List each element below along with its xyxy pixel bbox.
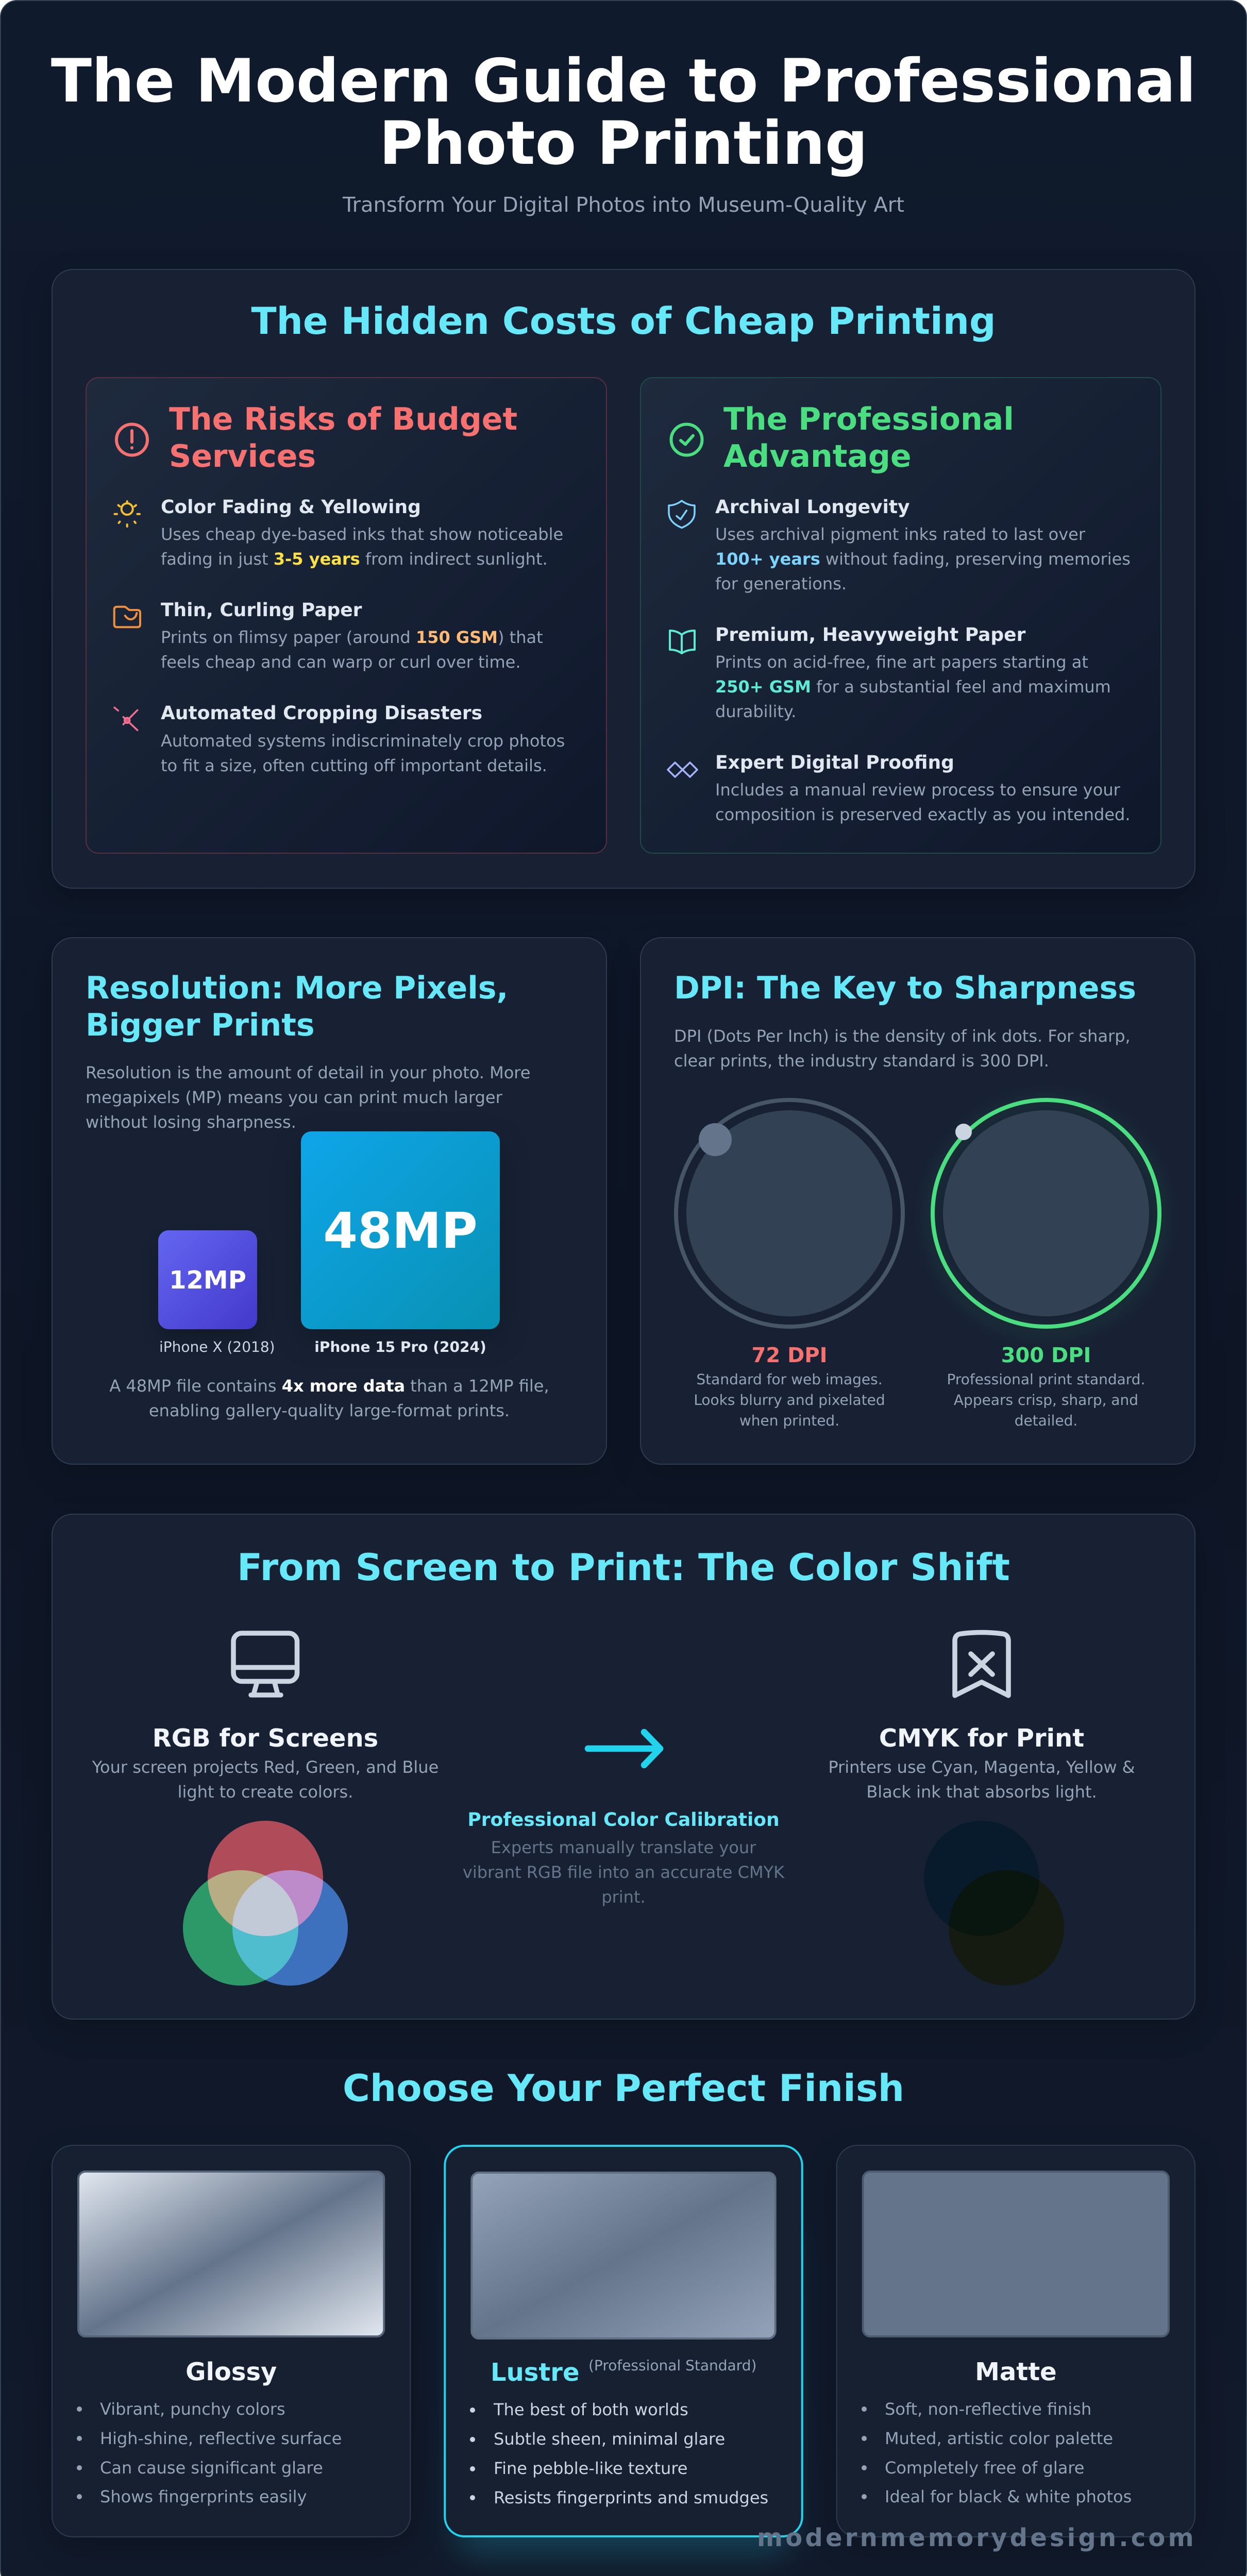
panel: glossy — [52, 2145, 411, 2548]
item: thin paper: Prints on flimsy paper (around — [161, 628, 416, 647]
text: resolution note: 4x more data than a 12MP file, — [282, 1376, 549, 1396]
swatch: matte — [863, 2172, 1169, 2336]
text: resolution intro: Resolution is the amount of detail in your photo. More — [86, 1063, 530, 1082]
graphic: 300 DPI circle — [932, 1100, 1160, 1332]
watermark: modernmemorydesign.com — [757, 2523, 1197, 2552]
subtitle: Transform Your Digital Photos into Museum-Quality Art — [342, 193, 904, 217]
panel: DPI — [640, 938, 1195, 1475]
item: archival longevity: for generations. — [715, 574, 847, 594]
item: heavyweight paper: durability. — [715, 702, 796, 721]
icon: shield — [669, 501, 695, 528]
list: glossy — [77, 2399, 342, 2506]
block: calibration: Professional Color Calibration — [467, 1809, 780, 1831]
icon: book — [670, 631, 695, 653]
heading: hidden costs: The Hidden Costs of Cheap Printing — [251, 299, 996, 343]
heading: resolution: Bigger Prints — [86, 1007, 315, 1043]
label: iPhone X: iPhone X (2018) — [159, 1338, 275, 1355]
panel: resolution — [52, 938, 607, 1475]
label: 72 DPI — [694, 1344, 885, 1429]
item: archival longevity: Archival Longevity — [715, 497, 910, 518]
list: glossy: High-shine, reflective surface — [100, 2429, 342, 2448]
title: Photo Printing — [379, 109, 868, 178]
block: calibration: Experts manually translate your — [491, 1838, 756, 1857]
graphic: CMYK venn — [924, 1821, 1064, 1986]
text: resolution intro: megapixels (MP) means you can print much larger — [86, 1088, 503, 1107]
icon: bookmark x — [955, 1632, 1008, 1696]
label: 72 DPI: Standard for web images. — [696, 1371, 883, 1388]
icon: sun — [114, 501, 140, 527]
item: heavyweight paper — [715, 624, 1111, 721]
arrow — [588, 1732, 660, 1765]
heading: finish: Choose Your Perfect Finish — [343, 2066, 904, 2110]
list: glossy: Can cause significant glare — [100, 2458, 323, 2478]
item: cropping disasters: to fit a size, often cutting off important details. — [161, 756, 547, 775]
block: RGB: Your screen projects Red, Green, and Blue — [92, 1757, 439, 1777]
heading: advantage: The Professional — [723, 401, 1014, 437]
item: color fading: fading in just — [161, 549, 274, 569]
item: heavyweight paper: Prints on acid-free, fine art papers starting at — [715, 652, 1088, 672]
list: matte: Completely free of glare — [885, 2458, 1084, 2478]
item: archival longevity: Uses archival pigment inks rated to last over — [715, 524, 1086, 544]
block: CMYK: CMYK for Print — [879, 1724, 1084, 1753]
graphic: 12MP tile: 12MP — [169, 1266, 246, 1295]
block: CMYK: Black ink that absorbs light. — [866, 1782, 1097, 1802]
heading: risks: The Risks of Budget — [169, 401, 517, 437]
text: resolution intro: without losing sharpness. — [86, 1112, 296, 1132]
label: 72 DPI: Looks blurry and pixelated — [694, 1392, 885, 1409]
list: lustre: Fine pebble-like texture — [494, 2459, 687, 2478]
list: matte: Ideal for black & white photos — [885, 2487, 1132, 2506]
item: heavyweight paper: 250+ GSM — [715, 677, 811, 697]
label: iPhone 15 Pro: iPhone 15 Pro (2024) — [314, 1338, 486, 1355]
item: digital proofing — [715, 752, 1130, 824]
item: heavyweight paper: for a substantial feel and maximum — [811, 677, 1111, 697]
label: 300 DPI: detailed. — [1015, 1412, 1077, 1429]
list: lustre: The best of both worlds — [493, 2400, 688, 2419]
graphic: 48MP tile: 48MP — [323, 1202, 478, 1260]
item: digital proofing: Includes a manual review process to ensure your — [715, 780, 1121, 800]
item: archival longevity — [715, 497, 1131, 594]
icon: monitor — [233, 1633, 297, 1695]
block: calibration: print. — [601, 1887, 646, 1907]
graphic: 72 DPI circle — [676, 1100, 903, 1327]
item: cropping disasters: Automated Cropping Disasters — [161, 703, 482, 724]
list: glossy: Vibrant, punchy colors — [100, 2399, 285, 2419]
panel: matte — [836, 2145, 1195, 2548]
item: heavyweight paper: Premium, Heavyweight Paper — [715, 624, 1026, 646]
item: digital proofing: Expert Digital Proofing — [715, 752, 954, 773]
label: 300 DPI: Appears crisp, sharp, and — [954, 1392, 1138, 1409]
heading: advantage: Advantage — [723, 438, 912, 474]
label: matte: Matte — [975, 2358, 1057, 2386]
heading: DPI: DPI: The Key to Sharpness — [674, 970, 1136, 1006]
graphic: 12MP tile — [158, 1230, 257, 1340]
text: DPI intro: DPI (Dots Per Inch) is the density of ink dots. For sharp, — [674, 1026, 1131, 1046]
swatch: glossy — [78, 2172, 384, 2336]
list: lustre — [470, 2400, 768, 2507]
item: thin paper: Thin, Curling Paper — [161, 600, 362, 621]
list: matte: Muted, artistic color palette — [885, 2429, 1113, 2448]
label: 300 DPI — [947, 1344, 1145, 1429]
list: lustre: Subtle sheen, minimal glare — [494, 2429, 725, 2449]
block: CMYK — [828, 1724, 1135, 1802]
item: thin paper: 150 GSM) that — [416, 628, 543, 647]
list: matte: Soft, non-reflective finish — [885, 2399, 1091, 2419]
label: lustre — [491, 2357, 756, 2387]
label: lustre: Lustre — [491, 2358, 579, 2387]
item: color fading: Color Fading & Yellowing — [161, 497, 421, 518]
item: archival longevity: 100+ years — [715, 549, 820, 569]
block: RGB — [92, 1724, 439, 1802]
text: resolution note: A 48MP file contains — [109, 1376, 282, 1396]
block: calibration: vibrant RGB file into an accurate CMYK — [463, 1862, 785, 1882]
icon: check circle — [671, 425, 702, 455]
item: digital proofing: composition is preserved exactly as you intended. — [715, 805, 1130, 824]
panel: hidden costs — [52, 269, 1195, 899]
block: RGB: light to create colors. — [178, 1782, 353, 1802]
list: glossy: Shows fingerprints easily — [100, 2487, 307, 2506]
text: resolution note: enabling gallery-quality large-format prints. — [149, 1401, 510, 1420]
label: 72 DPI: 72 DPI — [751, 1344, 828, 1367]
icon: crop disaster — [114, 707, 138, 730]
title: The Modern Guide to Professional — [51, 46, 1196, 116]
item: thin paper: feels cheap and can warp or curl over time. — [161, 652, 520, 672]
item: cropping disasters — [161, 703, 565, 775]
panel: color shift — [52, 1514, 1195, 2030]
item: cropping disasters: Automated systems indiscriminately crop photos — [161, 731, 565, 751]
item: thin paper — [161, 600, 543, 672]
item: color fading: 3-5 years from indirect sunlight. — [274, 549, 548, 569]
block: CMYK: Printers use Cyan, Magenta, Yellow & — [828, 1757, 1135, 1777]
heading: color shift: From Screen to Print: The Color Shift — [237, 1546, 1010, 1589]
label: 72 DPI: when printed. — [739, 1412, 839, 1429]
block: RGB: RGB for Screens — [153, 1724, 378, 1753]
icon: linked diamonds — [668, 762, 697, 777]
block: calibration — [463, 1809, 785, 1907]
list: matte — [862, 2399, 1132, 2506]
heading: risks: Services — [169, 438, 316, 474]
label: lustre: (Professional Standard) — [588, 2357, 756, 2374]
item: color fading: Uses cheap dye-based inks that show noticeable — [161, 524, 563, 544]
graphic: RGB venn — [183, 1821, 348, 1986]
heading: resolution: Resolution: More Pixels, — [86, 970, 508, 1006]
label: 300 DPI: Professional print standard. — [947, 1371, 1145, 1388]
item: color fading — [161, 497, 563, 569]
label: 300 DPI: 300 DPI — [1001, 1344, 1091, 1367]
panel: lustre — [445, 2146, 802, 2555]
panel: professional advantage — [641, 378, 1161, 853]
graphic: 48MP tile — [301, 1131, 500, 1340]
text: DPI intro: clear prints, the industry standard is 300 DPI. — [674, 1051, 1049, 1071]
item: archival longevity: without fading, preserving memories — [820, 549, 1131, 569]
label: glossy: Glossy — [186, 2358, 277, 2386]
panel: risks of budget services — [86, 378, 606, 853]
list: lustre: Resists fingerprints and smudges — [494, 2488, 768, 2507]
swatch: lustre — [471, 2173, 776, 2338]
icon: alert circle — [116, 425, 147, 455]
icon: folder — [114, 607, 140, 627]
